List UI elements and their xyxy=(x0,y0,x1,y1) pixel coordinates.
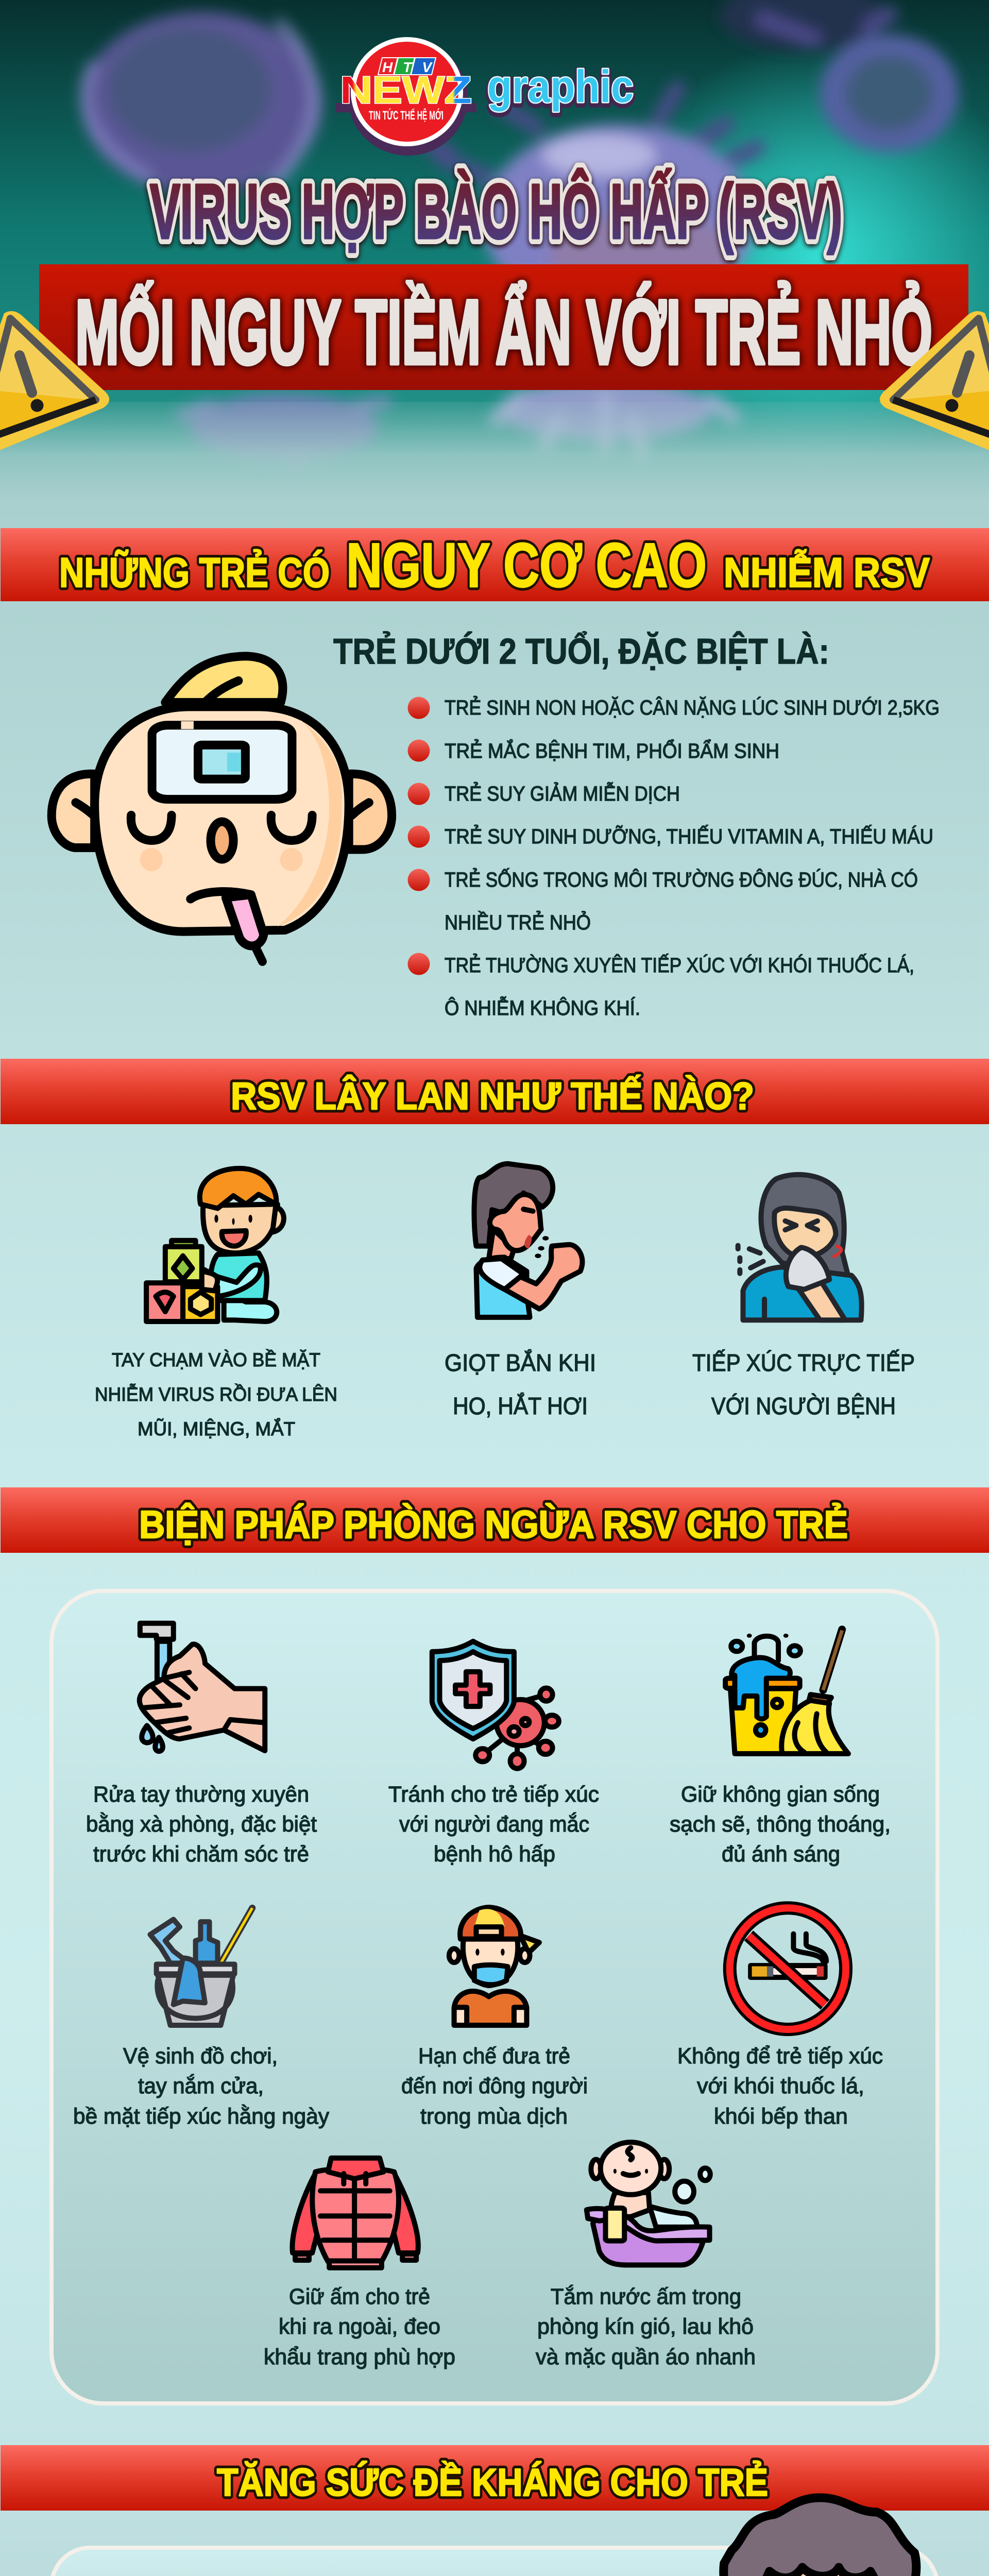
text: avoid contact: bệnh hô hấp xyxy=(434,1842,555,1867)
text: avoid smoke: khói bếp than xyxy=(714,2104,848,2129)
heading bar: high risk: NGUY CƠ CAO xyxy=(346,530,707,600)
icon: no smoking sign xyxy=(730,1908,846,2029)
icon: sick baby with thermometer xyxy=(52,656,392,961)
icon: coughing man xyxy=(474,1164,583,1317)
text: clean toys: tay nắm cửa, xyxy=(138,2074,264,2098)
logo NEWZ wordmark: NEWZ xyxy=(340,69,472,111)
text: droplets: HO, HẮT HƠI xyxy=(453,1393,588,1419)
icon: child with cap and mask xyxy=(449,1907,539,2025)
text: warm bath: phòng kín gió, lau khô xyxy=(537,2314,754,2339)
heading bar: high risk: NGUY CƠ CAO xyxy=(346,530,707,600)
text: droplets xyxy=(445,1349,596,1419)
text: direct contact xyxy=(692,1349,915,1419)
heading bar: high risk: NHIỄM RSV xyxy=(724,549,930,596)
text: avoid contact xyxy=(388,1782,599,1867)
icon: baby in bathtub xyxy=(587,2142,710,2265)
heading bar: prevention: BIỆN PHÁP PHÒNG NGỪA RSV CHO TRẺ xyxy=(139,1503,848,1546)
text: keep warm: Giữ ấm cho trẻ xyxy=(289,2284,430,2309)
logo graphic wordmark: graphic xyxy=(487,63,634,114)
icon: red winter jacket xyxy=(293,2158,418,2268)
text: wash hands xyxy=(86,1782,317,1867)
text: droplets: GIỌT BẮN KHI xyxy=(445,1349,596,1376)
heading bar: resistance: TĂNG SỨC ĐỀ KHÁNG CHO TRẺ xyxy=(217,2461,768,2504)
section: high risk children xyxy=(1,528,989,1020)
text: clean toys: bề mặt tiếp xúc hằng ngày xyxy=(73,2104,329,2129)
bullet list: TRẺ SINH NON HOẶC CÂN NẶNG LÚC SINH DƯỚI 2,5KG xyxy=(445,696,940,719)
heading bar: high risk: NHỮNG TRẺ CÓ xyxy=(59,549,330,596)
text: avoid crowds: đến nơi đông người xyxy=(401,2074,588,2098)
logo: HTV NEWZ graphic xyxy=(336,37,634,156)
section: prevention xyxy=(1,1487,989,2403)
icon: woman sneezing into tissue xyxy=(738,1175,862,1320)
text: avoid contact: Tránh cho trẻ tiếp xúc xyxy=(388,1782,599,1807)
bullet list: NHIỀU TRẺ NHỎ xyxy=(445,910,591,934)
heading bar: spread: RSV LÂY LAN NHƯ THẾ NÀO? xyxy=(231,1075,754,1117)
bullet list: TRẺ SUY GIẢM MIỄN DỊCH xyxy=(445,782,680,805)
text: clean space: sạch sẽ, thông thoáng, xyxy=(670,1812,891,1837)
text: avoid smoke: với khói thuốc lá, xyxy=(697,2074,864,2098)
heading bar: high risk: NHỮNG TRẺ CÓ xyxy=(59,549,330,596)
title banner xyxy=(39,264,968,390)
text: keep warm xyxy=(264,2284,455,2369)
text: warm bath: và mặc quần áo nhanh xyxy=(536,2345,756,2369)
icon: child with toy blocks xyxy=(146,1168,284,1321)
logo HTV blocks: HTV xyxy=(382,59,433,75)
bullet list: TRẺ THƯỜNG XUYÊN TIẾP XÚC VỚI KHÓI THUỐC LÁ, xyxy=(445,953,914,977)
bullet list: TRẺ SUY DINH DƯỠNG, THIẾU VITAMIN A, THIẾU MÁU xyxy=(445,824,933,848)
panel: resistance tips xyxy=(52,2548,937,2576)
heading bar: high risk xyxy=(1,528,989,601)
text: clean space: đủ ánh sáng xyxy=(722,1842,840,1867)
icon: cleaning supplies pail xyxy=(150,1908,252,2025)
text: clean toys xyxy=(73,2044,329,2129)
text: avoid crowds: Hạn chế đưa trẻ xyxy=(418,2044,570,2069)
text: surface contact: TAY CHẠM VÀO BỀ MẶT xyxy=(112,1349,320,1370)
icon: hand washing xyxy=(140,1623,265,1751)
heading bar: spread: RSV LÂY LAN NHƯ THẾ NÀO? xyxy=(231,1075,754,1117)
bullet list: TRẺ SỐNG TRONG MÔI TRƯỜNG ĐÔNG ĐÚC, NHÀ CÓ xyxy=(445,868,918,891)
logo tagline: TIN TỨC THẾ HỆ MỚI xyxy=(369,108,444,123)
icon: warning triangle right xyxy=(880,311,989,459)
section: how RSV spreads xyxy=(1,1059,989,1439)
text: wash hands: Rửa tay thường xuyên xyxy=(93,1782,309,1807)
logo graphic wordmark: graphic xyxy=(487,61,634,112)
heading bar: prevention xyxy=(1,1487,989,1553)
bullet list xyxy=(408,696,940,1020)
text: direct contact: VỚI NGƯỜI BỆNH xyxy=(711,1393,896,1419)
icon: person blowing nose xyxy=(716,2498,924,2576)
heading bar: high risk: NHIỄM RSV xyxy=(724,549,930,596)
icon: shield and virus xyxy=(432,1641,559,1769)
text: wash hands: trước khi chăm sóc trẻ xyxy=(93,1842,309,1867)
text: clean space: Giữ không gian sống xyxy=(681,1782,880,1807)
text: keep warm: khẩu trang phù hợp xyxy=(264,2345,455,2369)
text: avoid crowds xyxy=(401,2044,588,2129)
subheading: TRẺ DƯỚI 2 TUỔI, ĐẶC BIỆT LÀ: xyxy=(333,631,829,671)
heading bar: resistance xyxy=(1,2445,989,2511)
text: wash hands: bằng xà phòng, đặc biệt xyxy=(86,1812,317,1837)
text: clean space xyxy=(670,1782,891,1867)
text: avoid contact: với người đang mắc xyxy=(399,1812,589,1837)
text: keep warm: khi ra ngoài, đeo xyxy=(279,2314,440,2339)
text: clean toys: Vệ sinh đồ chơi, xyxy=(123,2044,278,2069)
heading bar: prevention: BIỆN PHÁP PHÒNG NGỪA RSV CHO TRẺ xyxy=(139,1503,848,1546)
text: avoid smoke: Không để trẻ tiếp xúc xyxy=(677,2044,883,2069)
text: direct contact: TIẾP XÚC TRỰC TIẾP xyxy=(692,1349,915,1376)
text: warm bath: Tắm nước ấm trong xyxy=(551,2284,741,2309)
icon: warning triangle left xyxy=(0,311,109,459)
icon: cleaning bucket and broom xyxy=(725,1630,848,1754)
heading bar: spread xyxy=(1,1059,989,1124)
hero: blurred virus background xyxy=(0,0,989,515)
bullet list: TRẺ MẮC BỆNH TIM, PHỔI BẨM SINH xyxy=(445,738,779,762)
text: surface contact: NHIỄM VIRUS RỒI ĐƯA LÊN xyxy=(95,1383,337,1405)
text: warm bath xyxy=(536,2284,756,2369)
text: avoid crowds: trong mùa dịch xyxy=(420,2104,568,2129)
section: boost resistance xyxy=(1,2445,989,2576)
heading bar: resistance: TĂNG SỨC ĐỀ KHÁNG CHO TRẺ xyxy=(217,2461,768,2504)
text: avoid smoke xyxy=(677,2044,883,2129)
text: surface contact: MŨI, MIỆNG, MẮT xyxy=(138,1418,295,1439)
panel: prevention measures xyxy=(52,1591,937,2403)
text: surface contact xyxy=(95,1349,337,1439)
bullet list: Ô NHIỄM KHÔNG KHÍ. xyxy=(445,996,640,1020)
